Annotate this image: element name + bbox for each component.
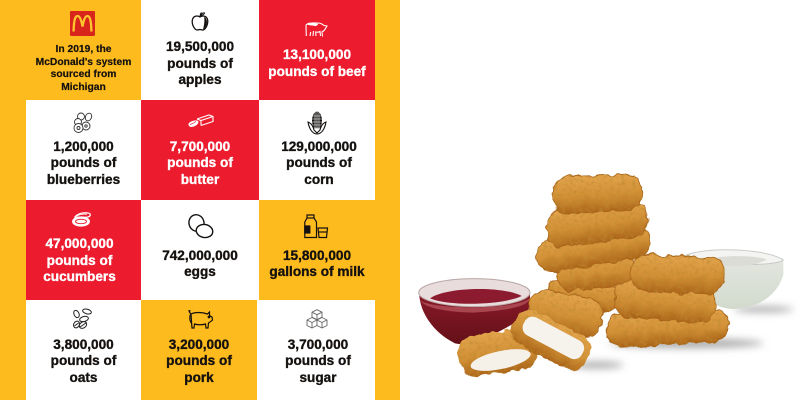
panel: beef — [259, 0, 375, 100]
panel: eggs — [141, 200, 259, 300]
panel: cucumbers — [26, 200, 141, 300]
corn text — [281, 138, 357, 187]
icon: cucumbers — [72, 212, 91, 227]
oats text: pounds of — [51, 353, 116, 368]
nugget stack — [534, 173, 653, 313]
intro text: sourced from — [51, 69, 116, 80]
cucumbers text — [43, 236, 116, 284]
sugar text: 3,700,000 — [288, 336, 348, 352]
panel: oats — [26, 300, 141, 400]
pork text — [166, 336, 232, 386]
blueberries text: blueberries — [47, 172, 120, 187]
oats text: 3,800,000 — [53, 336, 114, 352]
cut nuggets — [456, 304, 596, 378]
icon: McDonald's logo — [70, 11, 95, 36]
front nuggets — [525, 254, 729, 347]
icon: blueberries — [74, 112, 92, 133]
milk text: gallons of milk — [269, 264, 365, 279]
icon: butter — [188, 114, 214, 127]
panel: intro — [26, 0, 141, 100]
icon: oats — [73, 308, 92, 329]
corn text: corn — [304, 172, 334, 187]
icon: apple — [192, 12, 208, 31]
butter text: butter — [181, 172, 219, 187]
beef text — [268, 47, 366, 80]
eggs text: eggs — [184, 264, 216, 279]
sugar text — [285, 336, 352, 386]
apples text: apples — [178, 72, 222, 87]
apples text: pounds of — [167, 56, 233, 71]
pork text: pork — [184, 370, 214, 385]
photo: chicken nuggets with sauces — [418, 173, 794, 378]
beef text: 13,100,000 — [283, 47, 351, 62]
intro text: In 2019, the — [55, 44, 112, 55]
ranch bowl — [683, 250, 783, 309]
milk text: 15,800,000 — [283, 248, 351, 262]
corn text: 129,000,000 — [281, 138, 357, 154]
milk text — [269, 248, 365, 280]
blueberries text: pounds of — [51, 155, 116, 170]
ketchup bowl — [419, 279, 530, 344]
icon: corn — [307, 112, 327, 134]
panel: blueberries — [26, 100, 141, 200]
cucumbers text: cucumbers — [43, 269, 116, 284]
eggs text: 742,000,000 — [162, 248, 238, 262]
butter text: pounds of — [167, 155, 233, 170]
eggs text — [162, 248, 238, 280]
panel: corn — [259, 100, 375, 200]
sugar text: pounds of — [285, 353, 351, 368]
beef text: pounds of beef — [268, 64, 366, 79]
shadows — [570, 306, 793, 368]
cucumbers text: pounds of — [47, 253, 112, 268]
sugar text: sugar — [299, 370, 337, 385]
intro text: Michigan — [61, 82, 106, 92]
icon: eggs — [188, 214, 214, 238]
icon: sugar cubes — [306, 309, 328, 328]
panel: butter — [141, 100, 259, 200]
butter text — [167, 138, 234, 187]
corn text: pounds of — [286, 155, 352, 170]
panel: sugar — [257, 300, 375, 400]
cucumbers text: 47,000,000 — [45, 236, 114, 251]
blueberries text — [47, 138, 120, 187]
butter text: 7,700,000 — [170, 138, 230, 154]
panel: pork — [141, 300, 257, 400]
oats text: oats — [70, 370, 97, 385]
panel: apples — [141, 0, 259, 100]
pork text: 3,200,000 — [169, 336, 229, 352]
apples text — [166, 39, 234, 88]
panel: milk — [259, 200, 375, 300]
oats text — [51, 336, 117, 385]
intro text — [36, 44, 131, 92]
intro text: McDonald's system — [36, 56, 131, 68]
icon: cow — [305, 22, 328, 36]
panel: yellow background — [0, 0, 400, 400]
icon: pig — [188, 310, 214, 329]
icon: milk bottle and glass — [304, 214, 328, 238]
apples text: 19,500,000 — [166, 39, 234, 54]
blueberries text: 1,200,000 — [53, 138, 114, 154]
pork text: pounds of — [166, 353, 232, 368]
